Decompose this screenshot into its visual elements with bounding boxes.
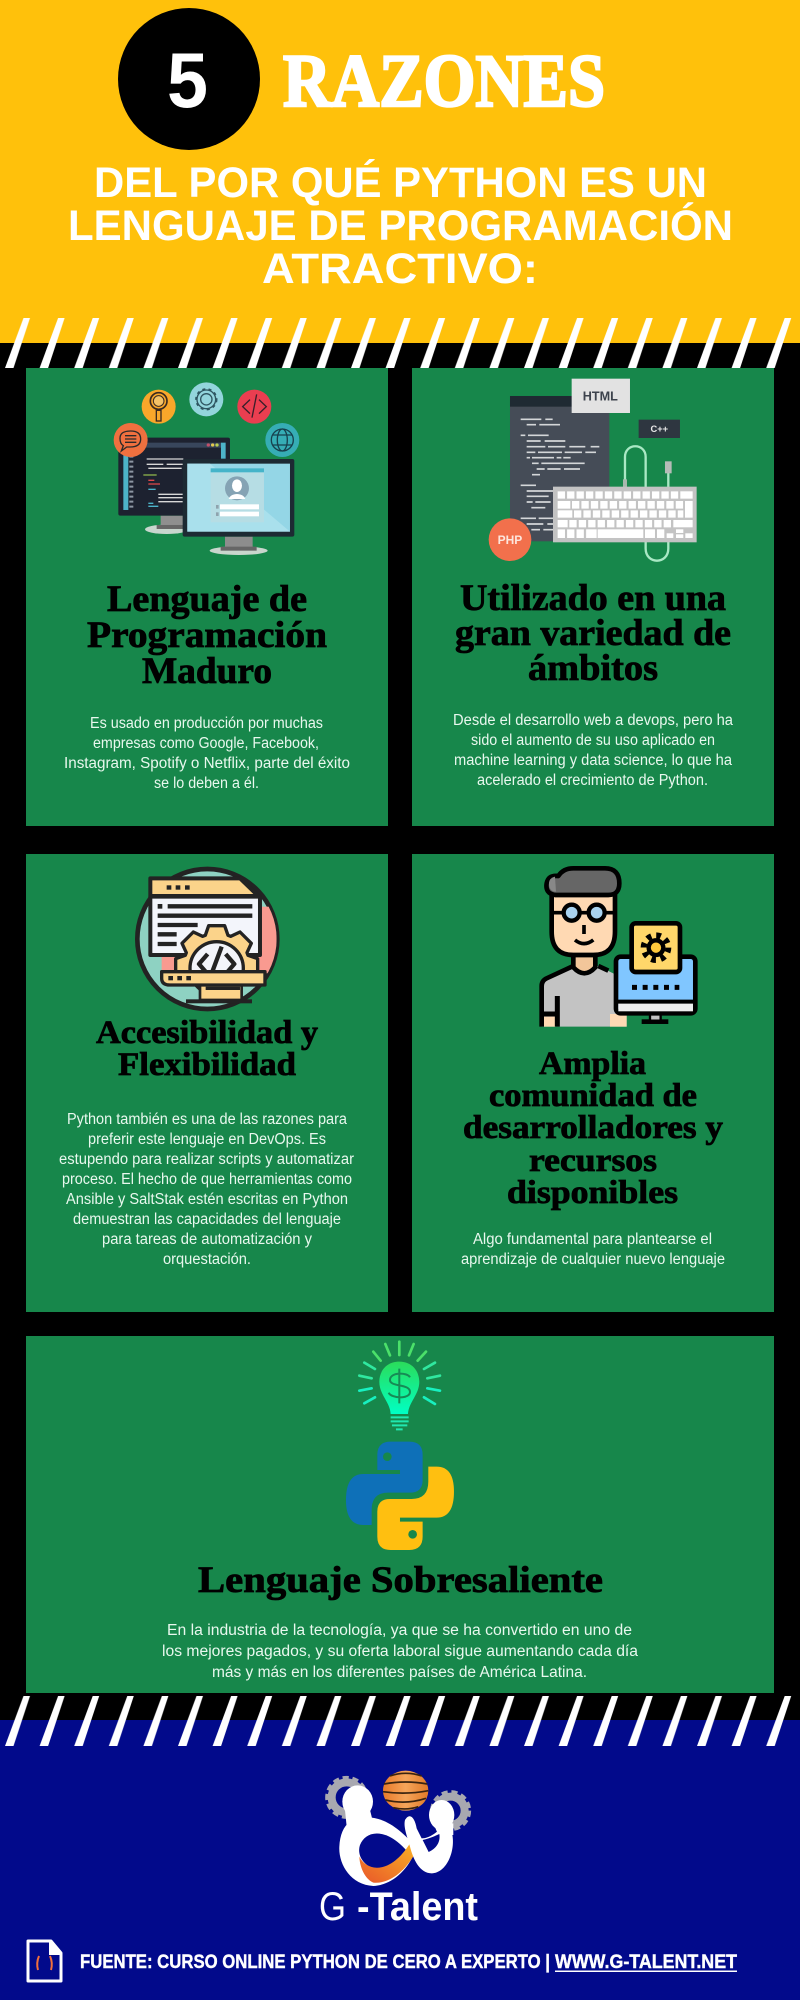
body text: orquestación. bbox=[163, 1251, 251, 1268]
icon: gears bbox=[327, 1778, 469, 1829]
icon: code sheet and keyboard: C++ bbox=[650, 424, 669, 434]
body text: aprendizaje de cualquier nuevo lenguaje bbox=[461, 1251, 725, 1268]
body text: preferir este lenguaje en DevOps. Es bbox=[88, 1131, 326, 1148]
icon: orange globe bbox=[383, 1771, 428, 1811]
panel: lenguaje maduro bbox=[26, 368, 388, 826]
body text: más y más en los diferentes países de América Latina. bbox=[212, 1664, 587, 1681]
icon: code sheet and keyboard: HTML bbox=[583, 389, 618, 403]
title: RAZONES: RAZONES bbox=[283, 40, 605, 123]
heading bbox=[96, 1015, 319, 1083]
body text: Ansible y SaltStak estén escritas en Python bbox=[66, 1191, 348, 1208]
body text: Algo fundamental para plantearse el bbox=[473, 1231, 712, 1248]
heading: Accesibilidad y bbox=[96, 1015, 319, 1051]
heading: Programación bbox=[87, 615, 327, 656]
body text bbox=[461, 1231, 725, 1268]
body text bbox=[453, 712, 733, 789]
heading bbox=[455, 578, 731, 689]
heading: desarrolladores y bbox=[463, 1110, 724, 1146]
body text bbox=[59, 1111, 354, 1268]
body text: En la industria de la tecnología, ya que se ha convertido en uno de bbox=[167, 1622, 632, 1639]
body text: acelerado el crecimiento de Python. bbox=[477, 772, 708, 789]
heading: ámbitos bbox=[528, 648, 658, 689]
heading: Lenguaje Sobresaliente bbox=[198, 1560, 603, 1601]
panel: comunidad bbox=[412, 854, 774, 1312]
heading: comunidad de bbox=[489, 1078, 697, 1114]
body text: empresas como Google, Facebook, bbox=[93, 735, 319, 752]
icon: infinity figures bbox=[339, 1785, 454, 1886]
heading: Amplia bbox=[539, 1046, 646, 1082]
body text bbox=[64, 715, 350, 792]
icon: code sheet and keyboard: PHP bbox=[498, 533, 522, 547]
panel: variedad de ambitos bbox=[412, 368, 774, 826]
heading: Maduro bbox=[142, 651, 272, 692]
body text: Instagram, Spotify o Netflix, parte del éxito bbox=[64, 755, 350, 772]
logo: G-Talent wordmark: G bbox=[319, 1885, 346, 1929]
footer: blue band bbox=[0, 1720, 800, 2000]
logo: G-Talent emblem bbox=[327, 1771, 469, 1886]
icon: developer with monitor bbox=[540, 868, 695, 1027]
body text bbox=[162, 1622, 638, 1681]
body text: Es usado en producción por muchas bbox=[90, 715, 323, 732]
subtitle: ATRACTIVO: bbox=[262, 245, 538, 293]
icon: code window with gear bbox=[137, 869, 277, 1009]
heading bbox=[87, 579, 327, 692]
panel: lenguaje sobresaliente bbox=[26, 1336, 774, 1693]
icon: light bulb with dollar sign bbox=[359, 1342, 440, 1429]
header: yellow band bbox=[0, 0, 800, 343]
body text: demuestran las capacidades del lenguaje bbox=[73, 1211, 341, 1228]
source line: FUENTE: CURSO ONLINE PYTHON DE CERO A EXPERTO | bbox=[80, 1952, 550, 1973]
panel: accesibilidad bbox=[26, 854, 388, 1312]
icon: code sheet and keyboard bbox=[489, 379, 697, 561]
heading: Flexibilidad bbox=[118, 1047, 296, 1083]
subtitle: LENGUAJE DE PROGRAMACIÓN bbox=[68, 201, 733, 250]
body text: estupendo para realizar scripts y automatizar bbox=[59, 1151, 354, 1168]
subtitle: DEL POR QUÉ PYTHON ES UN bbox=[94, 159, 707, 207]
heading: Lenguaje de bbox=[107, 579, 307, 620]
body text: Desde el desarrollo web a devops, pero ha bbox=[453, 712, 733, 729]
source line: WWW.G-TALENT.NET bbox=[555, 1952, 737, 1973]
heading: gran variedad de bbox=[455, 613, 731, 654]
heading bbox=[463, 1046, 724, 1211]
icon: monitors with tech bubbles bbox=[114, 382, 299, 555]
body text: sido el aumento de su uso aplicado en bbox=[471, 732, 715, 749]
logo: G-Talent wordmark: -Talent bbox=[357, 1885, 478, 1929]
number badge: 5 bbox=[118, 8, 260, 150]
body text: se lo deben a él. bbox=[154, 775, 259, 792]
number badge: 5: 5 bbox=[167, 36, 208, 124]
icon: code file bbox=[28, 1941, 61, 1981]
subtitle bbox=[68, 159, 733, 293]
heading: recursos bbox=[529, 1143, 657, 1179]
heading: disponibles bbox=[507, 1175, 678, 1211]
body text: machine learning y data science, lo que ha bbox=[454, 752, 732, 769]
body text: para tareas de automatización y bbox=[102, 1231, 312, 1248]
heading: Utilizado en una bbox=[460, 578, 726, 619]
body text: Python también es una de las razones para bbox=[67, 1111, 347, 1128]
body text: proceso. El hecho de que herramientas como bbox=[62, 1171, 352, 1188]
body text: los mejores pagados, y su oferta laboral sigue aumentando cada día bbox=[162, 1643, 638, 1660]
icon: python logo bbox=[346, 1442, 454, 1550]
